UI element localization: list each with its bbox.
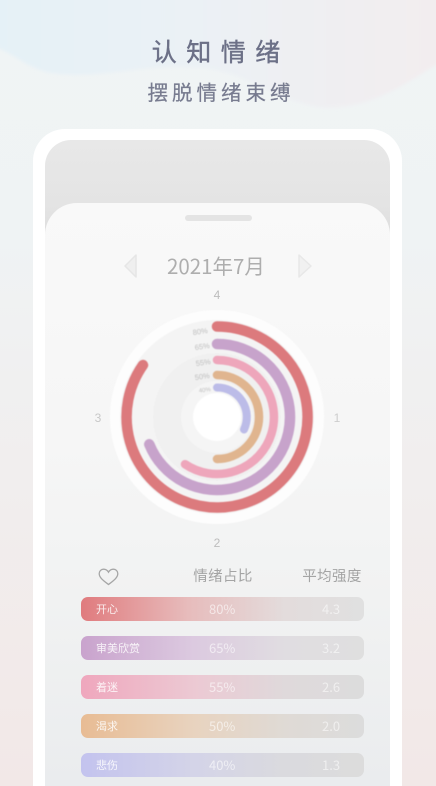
row: 开心: 开心 [96, 601, 118, 617]
ring percentage labels: 65% [194, 341, 211, 352]
row: 渴求: 渴求 [96, 718, 118, 734]
ring percentage labels: 55% [195, 357, 212, 368]
date label: 2021年7月 [167, 250, 265, 280]
ring: pink 55% [185, 360, 274, 474]
row: 着迷 [81, 675, 364, 699]
sheet panel [45, 203, 390, 786]
ring percentage labels: 50% [194, 371, 211, 382]
row: 悲伤: 1.3 [322, 755, 340, 774]
row: 着迷: 2.6 [322, 677, 340, 696]
row: 悲伤 [81, 753, 364, 777]
row: 渴求: 2.0 [322, 716, 340, 735]
ring: purple 65% [149, 344, 290, 490]
row: 悲伤: 悲伤 [96, 757, 118, 773]
axis label 2: 2 [214, 536, 220, 550]
phone screen backdrop [45, 140, 390, 270]
row: 开心 [81, 597, 364, 621]
ring percentage labels: 80% [192, 326, 209, 337]
row: 渴求 [81, 714, 364, 738]
subtitle: 摆脱情绪束缚 [148, 82, 294, 105]
row: 审美欣赏: 3.2 [322, 638, 340, 657]
axis label 1: 1 [334, 411, 340, 425]
phone frame [33, 129, 402, 786]
title: 认知情绪 [152, 39, 290, 67]
axis label 4: 4 [214, 288, 220, 302]
ring: tan 50% [217, 375, 259, 459]
row: 渴求: 50% [209, 716, 235, 735]
ring: blue 40% [217, 387, 247, 430]
axis label 3: 3 [95, 411, 101, 425]
ring percentage labels [192, 326, 212, 395]
row: 开心: 4.3 [322, 599, 340, 618]
ring: red 80% [127, 326, 308, 507]
icon: heart [98, 568, 118, 586]
row: 悲伤: 40% [209, 755, 235, 774]
row: 开心: 80% [209, 599, 235, 618]
row: 着迷: 55% [209, 677, 235, 696]
icon: previous arrow [124, 254, 137, 278]
column heading: share: 情绪占比 [193, 569, 253, 585]
drag handle [185, 215, 252, 221]
row: 审美欣赏: 审美欣赏 [96, 640, 140, 656]
column heading: intensity: 平均强度 [302, 569, 362, 585]
icon: next arrow [298, 254, 312, 278]
radial chart [120, 320, 314, 524]
row: 审美欣赏: 65% [209, 638, 235, 657]
row: 审美欣赏 [81, 636, 364, 660]
row: 着迷: 着迷 [96, 679, 118, 695]
ring percentage labels: 40% [199, 387, 212, 395]
